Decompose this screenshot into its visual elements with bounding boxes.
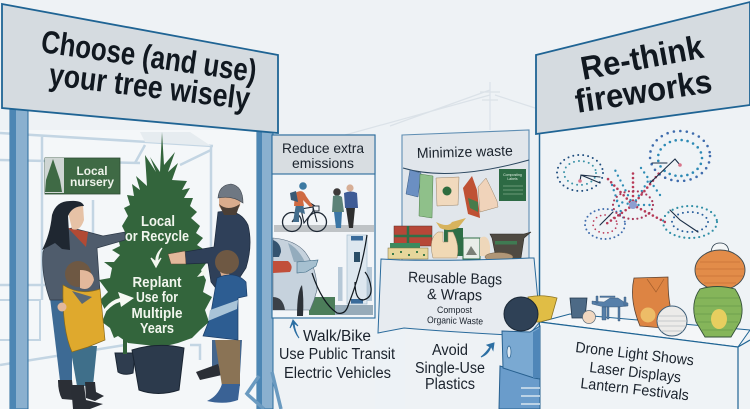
- gifts and compost: [388, 218, 531, 262]
- background: utility pole: [345, 82, 535, 135]
- transport list: Walk/Bike: [303, 328, 371, 345]
- transport list: Electric Vehicles: [284, 365, 391, 382]
- single-use list: Plastics: [425, 376, 475, 393]
- sign: fireworks: Re-think: [578, 28, 707, 87]
- background: nursery shelter: [0, 133, 281, 365]
- clothesline with bags: [403, 160, 529, 218]
- arrow: up: [290, 320, 299, 338]
- icon: orange sky lantern: [632, 277, 670, 328]
- chart: drone light display: [557, 131, 717, 239]
- single-use list: Avoid: [432, 342, 468, 359]
- dark ball: [504, 297, 538, 331]
- person: boy: [203, 250, 247, 403]
- single-use list: Single-Use: [415, 360, 485, 377]
- heading: Minimize waste: [417, 143, 513, 162]
- person: woman: [42, 201, 125, 400]
- charging cable: [312, 235, 371, 313]
- heading: [272, 135, 375, 174]
- blue boxes: [499, 326, 540, 409]
- table labels: Organic Waste: [427, 315, 483, 327]
- icon: dark bin: [570, 298, 587, 318]
- ground: [309, 297, 335, 315]
- panel: minimize waste: [378, 130, 540, 393]
- tree labels: or Recycle: [125, 228, 189, 245]
- icon: cyclist: [282, 182, 326, 232]
- icon: orange lantern: [695, 243, 745, 290]
- tree labels: Years: [140, 320, 174, 337]
- icon: small ball: [582, 310, 596, 324]
- arrow: up right: [481, 343, 494, 357]
- single-use list: [415, 342, 485, 393]
- tree: [96, 132, 212, 351]
- panel: choose your tree: [2, 4, 281, 409]
- composting label: Composting: [503, 173, 522, 177]
- yellow bucket: [528, 296, 557, 322]
- local nursery sign: [45, 158, 120, 194]
- icon: charging station: [338, 235, 372, 304]
- heading: emissions: [292, 155, 354, 171]
- local nursery sign: Local: [76, 166, 108, 178]
- composting label: [499, 169, 526, 201]
- local nursery sign: nursery: [70, 177, 115, 189]
- fireworks alternatives list: [575, 339, 695, 404]
- sign: fireworks: [536, 2, 750, 134]
- icon: green lantern: [694, 286, 742, 337]
- tablecloth: [378, 258, 540, 336]
- stacked boxes and props: [499, 296, 557, 409]
- composting label: Labels: [507, 177, 518, 181]
- icon: drone: [592, 296, 628, 321]
- small potted tree: [115, 338, 135, 374]
- tree labels: Local: [141, 213, 175, 230]
- transport list: Use Public Transit: [279, 346, 396, 363]
- sign heading: Choose (and use): [39, 23, 259, 89]
- sign: fireworks: fireworks: [572, 62, 714, 120]
- fireworks alternatives list: Drone Light Shows: [575, 339, 695, 369]
- tree left post: [10, 108, 28, 409]
- arrow: side: [197, 265, 207, 277]
- heading: Reduce extra: [282, 140, 364, 156]
- table labels: Compost: [437, 305, 472, 316]
- tree labels: [125, 213, 189, 337]
- person: child in yellow jacket: [58, 261, 105, 409]
- tree labels: Replant: [132, 274, 182, 291]
- fireworks alternatives list: Lantern Festivals: [580, 375, 690, 404]
- sign heading: [39, 23, 259, 117]
- table labels: Reusable Bags: [408, 269, 502, 288]
- transport list: [279, 328, 396, 382]
- fireworks alternatives list: Laser Displays: [589, 359, 682, 386]
- icon: white lantern: [657, 306, 687, 336]
- panel: re-think fireworks: [536, 2, 750, 409]
- display table: [540, 314, 750, 409]
- person: man: [168, 184, 250, 380]
- panel: reduce extra emissions: [272, 135, 396, 382]
- icon: electric car: [273, 238, 318, 316]
- sign heading: your tree wisely: [47, 56, 252, 117]
- table labels: & Wraps: [427, 286, 482, 304]
- tree labels: Multiple: [132, 305, 182, 322]
- icon: walking couple: [332, 184, 358, 228]
- tree right post: [246, 132, 281, 409]
- table labels: [408, 269, 502, 327]
- tree labels: Use for: [136, 289, 178, 306]
- arrow: recycle to replant: [151, 248, 162, 267]
- main tree pot: [132, 345, 184, 394]
- sign: tree: [2, 4, 278, 133]
- arrow: child to replant: [96, 292, 134, 328]
